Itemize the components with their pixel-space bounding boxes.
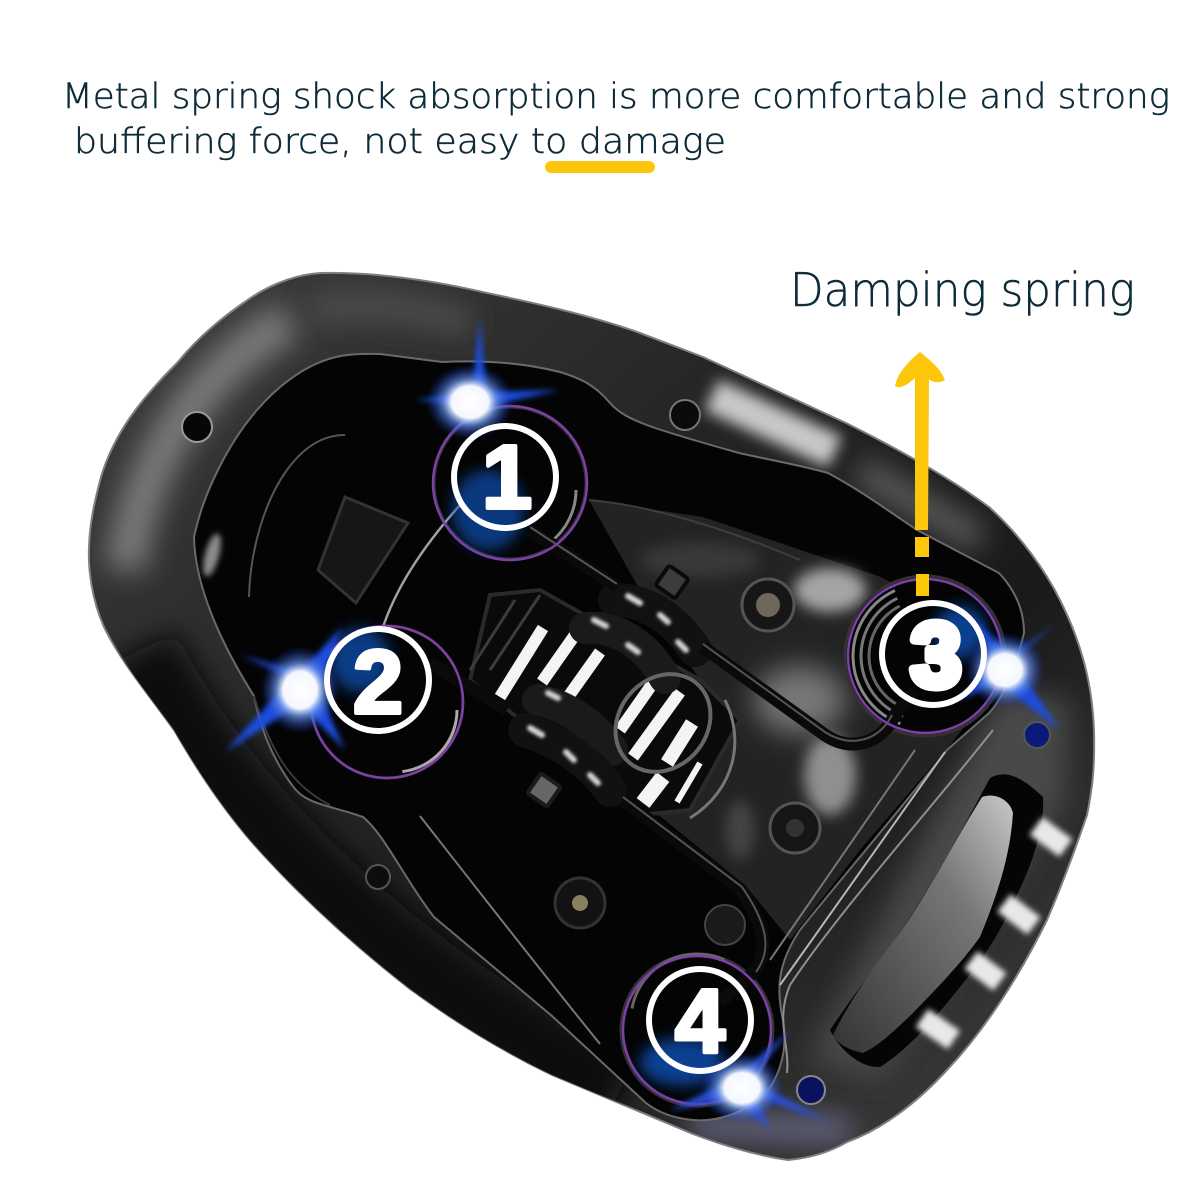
heading text: buffering force, not easy to damage — [74, 122, 726, 162]
marker 3: 3 — [911, 606, 961, 706]
heading text — [62, 77, 1170, 162]
inner well — [194, 354, 1024, 1120]
label: damping spring: Damping spring — [790, 263, 1135, 317]
oval pocket — [830, 774, 1043, 1067]
left square mount — [318, 497, 408, 603]
rim lines lower left — [249, 435, 600, 1044]
marker 3 — [848, 579, 1060, 733]
spring ring — [596, 655, 730, 791]
spring wires — [382, 505, 915, 1002]
seat base — [89, 273, 1094, 1160]
inner gray plate — [589, 500, 985, 940]
yellow underline — [545, 161, 655, 173]
coil springs — [311, 407, 1017, 1106]
rim highlights — [125, 306, 1070, 1130]
marker 2: 2 — [353, 633, 403, 733]
vent frame and slots — [470, 590, 740, 818]
marker 4: 4 — [675, 972, 725, 1072]
rim light bands — [922, 826, 1066, 1040]
mount holes — [182, 400, 1050, 1104]
marker 4 — [623, 956, 830, 1130]
marker 2 — [225, 626, 463, 778]
marker 1: 1 — [482, 428, 532, 528]
marker 1 — [415, 318, 587, 560]
bolts — [527, 565, 689, 807]
rivets — [555, 579, 820, 945]
heading text: Metal spring shock absorption is more comfortable and strong — [62, 77, 1170, 117]
outer rim — [89, 273, 1094, 1160]
pivot brackets — [525, 596, 695, 790]
arrow: yellow up — [895, 352, 945, 596]
channel lines — [589, 500, 993, 1073]
